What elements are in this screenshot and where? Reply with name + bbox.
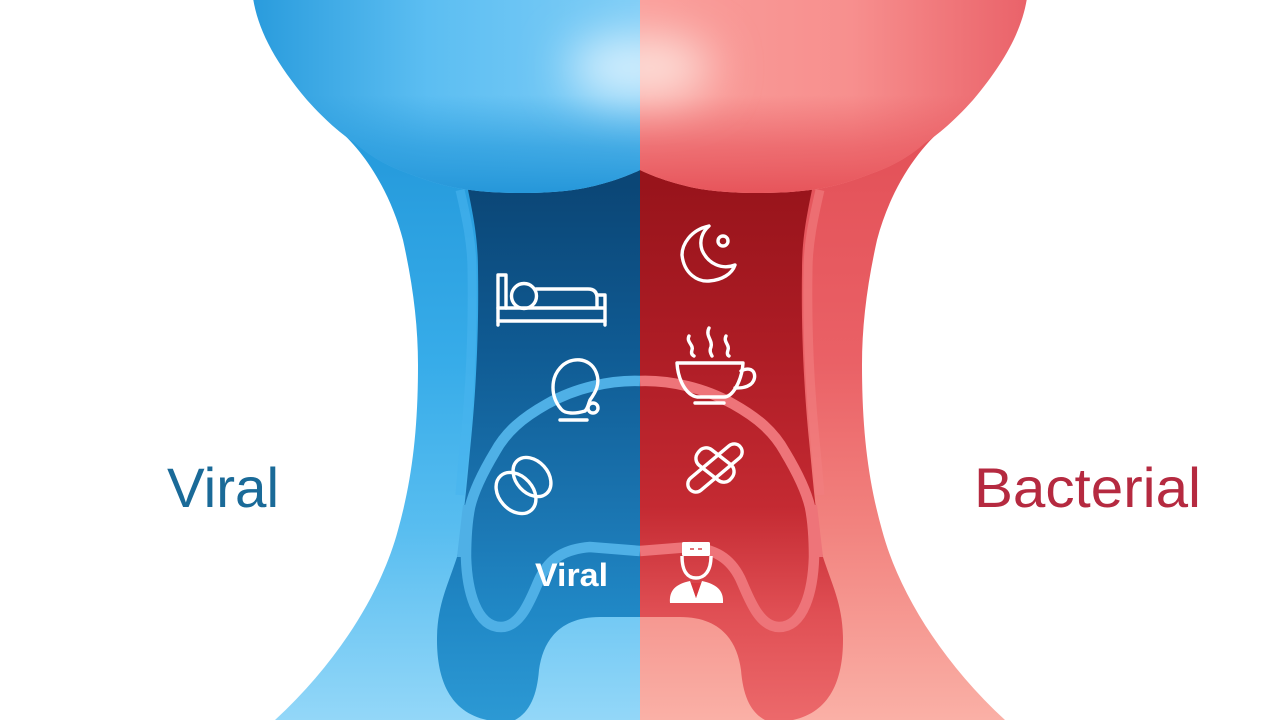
icon: bed (498, 275, 605, 325)
head: bacterial (640, 0, 1027, 193)
label: Viral inside throat: Viral (535, 557, 608, 593)
band junction: viral (457, 505, 465, 557)
icon: moon (682, 226, 735, 281)
heading: Viral: Viral (167, 456, 279, 519)
icon: doctor (670, 542, 723, 603)
neck silhouette: viral (275, 127, 640, 720)
head lower shading: bacterial (640, 105, 962, 193)
band junction: bacterial (815, 505, 823, 557)
panel: viral half of throat (253, 0, 640, 720)
inner throat cavity: viral (437, 160, 640, 720)
head highlight: bacterial (588, 38, 712, 98)
neck silhouette: bacterial (640, 127, 1005, 720)
throat band: bacterial (640, 381, 814, 627)
icon: head with cough (553, 360, 598, 420)
head lower shading: viral (312, 104, 640, 193)
icon: bandage (685, 441, 745, 495)
panel: bacterial half of throat (640, 0, 1027, 720)
icon: tea cup (677, 328, 755, 403)
neck inner highlight: viral (460, 190, 472, 495)
throat band: viral (466, 381, 640, 627)
heading: Bacterial: Bacterial (974, 456, 1201, 519)
head: viral (253, 0, 640, 193)
icon: pills (488, 450, 559, 521)
neck inner highlight: bacterial (808, 190, 820, 495)
inner throat cavity: bacterial (640, 160, 843, 720)
head highlight: viral (568, 38, 692, 98)
